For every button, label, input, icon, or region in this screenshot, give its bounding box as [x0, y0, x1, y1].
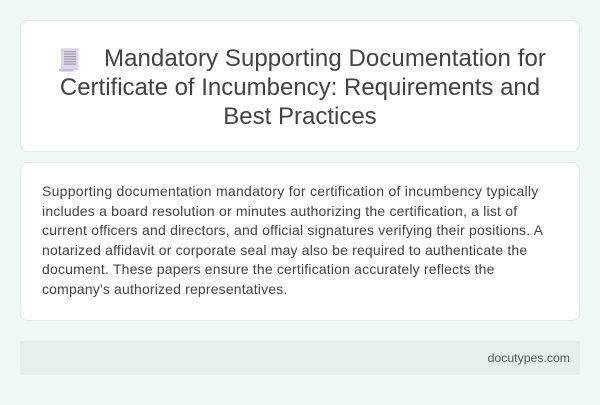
- heading: Certificate of Incumbency: Requirements and: [60, 74, 540, 101]
- footer bar: [20, 341, 580, 375]
- text block: includes a board resolution or minutes authorizing the certification, a list of: [42, 203, 517, 219]
- panel: title card: [20, 20, 580, 152]
- panel: description card: [20, 162, 580, 321]
- text block: Supporting documentation mandatory for certification of incumbency typically: [42, 183, 539, 199]
- heading: [60, 45, 546, 130]
- heading: Best Practices: [223, 103, 377, 130]
- text block: current officers and directors, and official signatures verifying their positions. A: [42, 222, 543, 238]
- text block: notarized affidavit or corporate seal may also be required to authenticate the: [42, 242, 527, 258]
- icon: document: [59, 48, 78, 72]
- text block: document. These papers ensure the certification accurately reflects the: [42, 261, 495, 277]
- footer text: docutypes.com: [488, 351, 570, 365]
- text block: company's authorized representatives.: [42, 281, 287, 297]
- heading: Mandatory Supporting Documentation for: [104, 45, 546, 72]
- text block: [42, 183, 543, 297]
